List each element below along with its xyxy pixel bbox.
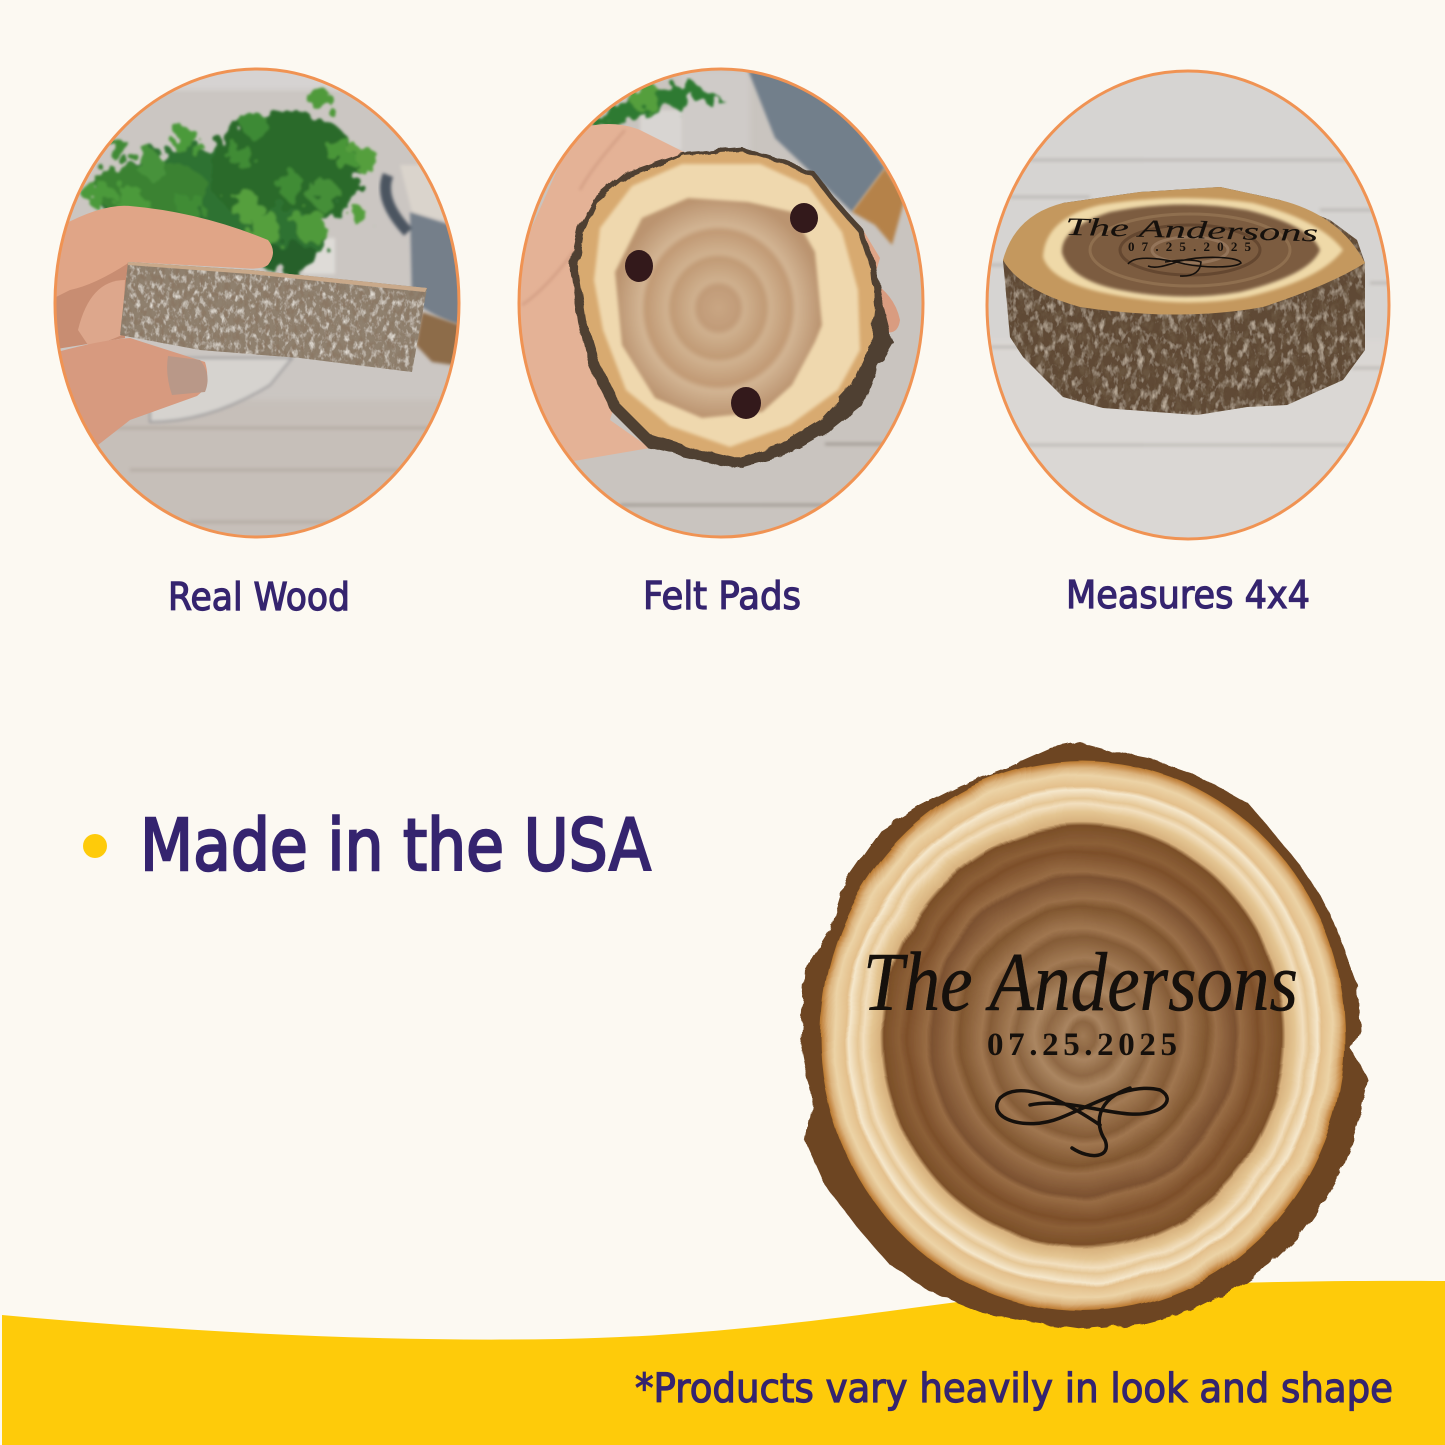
icon: green plant bbox=[590, 82, 725, 128]
hand holding wood bbox=[50, 206, 273, 445]
bullet bbox=[83, 834, 107, 858]
label: measures 4x4: Measures 4x4 bbox=[1066, 573, 1310, 617]
engraved date: 07.25.2025 bbox=[1128, 239, 1252, 254]
icon: felt pad bbox=[731, 387, 761, 419]
wood rings bbox=[821, 761, 1345, 1311]
panel: felt pads photo bbox=[515, 65, 930, 545]
engraved date: 07.25.2025 bbox=[987, 1027, 1177, 1063]
hand holding coaster bbox=[515, 124, 900, 462]
engraved coaster bbox=[1003, 187, 1365, 415]
yellow footer wave bbox=[2, 1281, 1445, 1445]
coaster underside bbox=[570, 147, 893, 470]
white planter bbox=[640, 110, 682, 150]
engraved flourish bbox=[1128, 257, 1241, 276]
bark edge bbox=[800, 742, 1368, 1330]
white planter bbox=[150, 238, 335, 422]
icon: grey mug bbox=[748, 65, 885, 212]
icon: felt pad bbox=[790, 203, 818, 233]
engraved name: The Andersons bbox=[863, 936, 1298, 1029]
large engraved wood slice bbox=[800, 742, 1368, 1330]
icon: grey mug bbox=[386, 165, 460, 325]
icon: felt pad bbox=[625, 250, 653, 282]
label: real wood: Real Wood bbox=[168, 575, 350, 619]
heading: made in the usa: Made in the USA bbox=[140, 804, 651, 887]
bark slab bbox=[120, 262, 427, 372]
icon: green plant bbox=[86, 91, 378, 273]
engraved name: The Andersons bbox=[1065, 214, 1318, 247]
footer note: *Products vary heavily in look and shape bbox=[635, 1366, 1393, 1412]
panel: real wood photo bbox=[50, 65, 465, 545]
engraved flourish bbox=[997, 1088, 1167, 1156]
panel: measures photo bbox=[980, 65, 1395, 545]
label: felt pads: Felt Pads bbox=[643, 574, 801, 618]
